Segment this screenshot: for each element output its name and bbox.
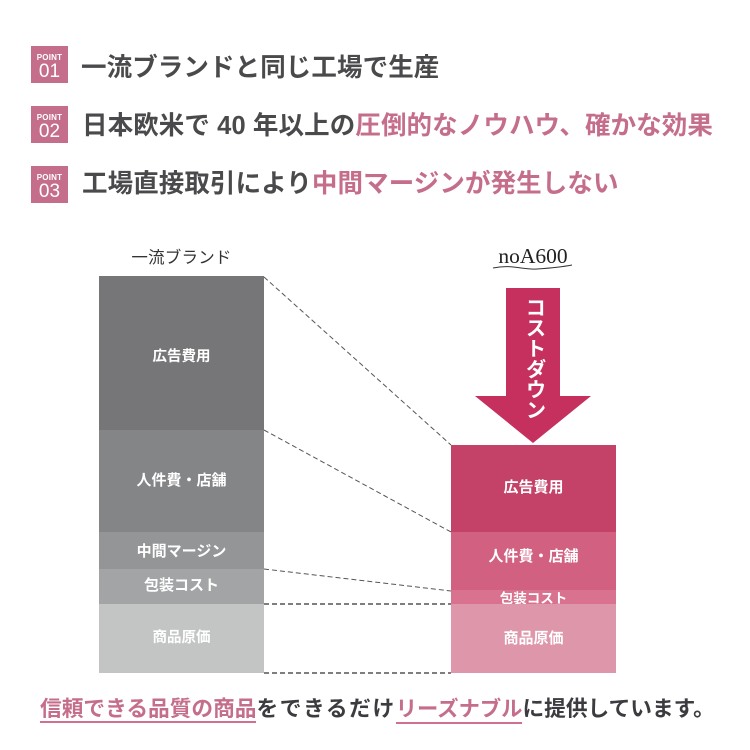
closing statement [40,696,715,724]
segment: packaging [99,569,264,604]
badge: point 03: POINT [37,173,62,182]
closing statement: をできるだけ に提供しています。 [256,696,715,721]
segment: middle margin: 中間マージン [137,543,226,560]
segment: advertising [99,276,264,430]
badge: point 02: 02 [39,121,60,142]
badge: point 01: 01 [39,61,60,82]
heading: point 03: 工場直接取引により中間マージンが発生しない [82,170,619,198]
badge: point 01 [31,46,68,83]
stacked bar: first-class brand [99,276,264,673]
badge: point 02 [31,106,68,143]
arrow: cost down [475,288,591,443]
segment: labor and stores [451,532,616,590]
segment: product cost: 商品原価 [503,630,564,647]
heading: point 01: 一流ブランドと同じ工場で生産 [81,54,439,82]
arrow label: コストダウン [522,297,545,420]
label: first-class brand column: 一流ブランド [131,249,232,267]
stacked bar: noA600 [451,445,616,673]
segment: labor and stores [99,430,264,532]
closing statement: リーズナブル [396,697,522,721]
badge: point 02: POINT [37,113,62,122]
segment: packaging: 包装コスト [144,577,219,594]
segment: middle margin [99,532,264,569]
segment: product cost: 商品原価 [152,630,210,646]
segment: advertising: 広告費用 [503,479,564,496]
segment: advertising: 広告費用 [152,349,210,365]
closing statement: 信頼できる品質の商品 [40,696,256,721]
segment: product cost [451,604,616,673]
logo: noA600: noA600 [498,244,568,268]
segment: packaging [451,590,616,604]
segment: packaging: 包装コスト [500,591,567,606]
badge: point 01: POINT [37,53,62,62]
segment: advertising [451,445,616,532]
segment: labor and stores: 人件費・店舗 [488,548,578,565]
segment: product cost [99,604,264,673]
badge: point 03: 03 [39,181,60,202]
heading: point 02: 日本欧米で 40 年以上の圧倒的なノウハウ、確かな効果 [82,112,713,140]
segment: labor and stores: 人件費・店舗 [136,472,226,489]
badge: point 03 [31,166,68,203]
